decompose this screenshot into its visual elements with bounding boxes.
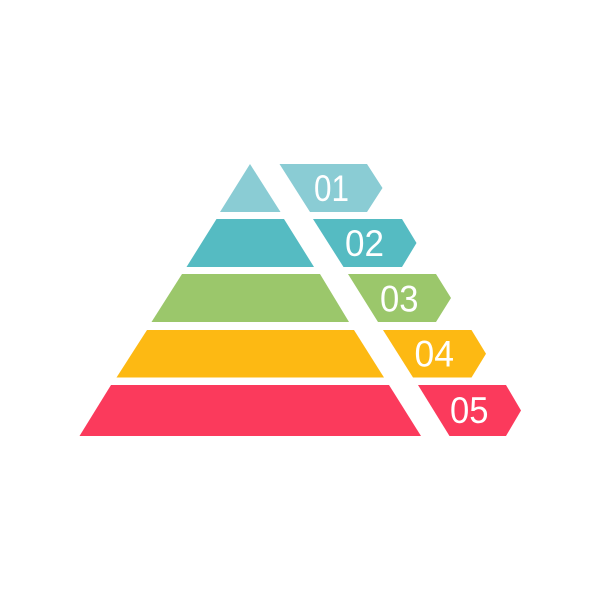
label arrow 05: 05 — [450, 390, 488, 431]
pyramid tier 1 — [220, 164, 280, 212]
label arrow 03: 03 — [380, 278, 418, 320]
label arrow 01: 01 — [314, 168, 349, 209]
label arrow 01 — [280, 164, 382, 212]
pyramid tier 2 — [186, 219, 314, 267]
pyramid tier 3 — [152, 274, 349, 322]
label arrow 04 — [383, 330, 486, 378]
label arrow 02: 02 — [345, 223, 384, 264]
label arrow 02 — [313, 219, 416, 267]
pyramid tier 5 — [80, 385, 421, 436]
label arrow 05 — [418, 385, 521, 436]
label arrow 03 — [348, 274, 451, 322]
label arrow 04: 04 — [414, 334, 454, 374]
pyramid tier 4 — [116, 330, 384, 378]
